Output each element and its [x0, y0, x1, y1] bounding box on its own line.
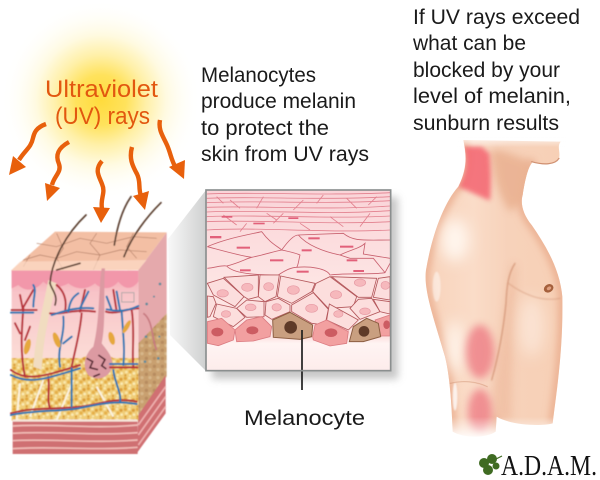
epidermis layer [12, 271, 138, 290]
label: ultraviolet rays: (UV) rays [55, 103, 150, 130]
text: melanocytes produce melanin: produce melanin [201, 90, 356, 113]
bottom fade [447, 417, 560, 440]
body contour lines [450, 158, 560, 387]
fat connective strands [17, 380, 113, 420]
text: melanocytes produce melanin: to protect the [201, 117, 329, 140]
contour edge shading [426, 140, 562, 432]
inset frame [206, 190, 391, 371]
text: sunburn explanation: level of melanin, [413, 85, 571, 108]
spinous cell nuclei [217, 279, 390, 317]
melanocyte cells [273, 312, 381, 342]
melanocyte nuclei [284, 321, 369, 337]
dermis layer [12, 271, 138, 358]
top fade [457, 133, 567, 147]
label: ultraviolet rays [45, 76, 158, 130]
text: sunburn explanation: blocked by your [413, 59, 560, 82]
mid flattened cell outlines [207, 232, 390, 275]
arm sunburn [466, 325, 494, 434]
melanocyte pointer line [299, 330, 304, 390]
dark cell nuclei upper layer [210, 216, 364, 273]
text: sunburn explanation: If UV rays exceed [413, 6, 580, 29]
torso shadow beside arm [493, 263, 517, 420]
inset shadow [212, 197, 398, 379]
neck shadow [490, 150, 532, 212]
nerve box [122, 293, 134, 302]
muscle layer [13, 419, 138, 454]
sun glow [1, 0, 201, 200]
arrow 1 [9, 124, 46, 175]
upper flattened cell layers [207, 193, 390, 232]
hairs [50, 197, 161, 305]
gland [85, 268, 112, 378]
basal pink nuclei [211, 320, 390, 337]
logo leaf icon [479, 454, 502, 475]
UV ray arrows [9, 120, 185, 223]
A.D.A.M. logo [479, 450, 597, 480]
right side face of skin block [137, 232, 167, 453]
clipped shading [426, 140, 562, 434]
text: sunburn explanation [412, 6, 580, 135]
arrow 4 [131, 147, 149, 210]
arrow 2 [45, 142, 69, 201]
text: sunburn explanation: what can be [412, 32, 526, 55]
neck sunburn [458, 147, 491, 201]
text: melanocytes produce melanin [201, 64, 369, 166]
gland ducts [87, 355, 106, 377]
basal pink cells [207, 315, 390, 346]
blood vessels: red [11, 285, 138, 413]
nipple [542, 282, 555, 294]
label: melanocyte: Melanocyte [244, 407, 365, 430]
text: melanocytes produce melanin: Melanocytes [201, 64, 316, 87]
blood vessels: blue [11, 285, 138, 415]
yellow sweat glands [22, 319, 132, 355]
spinous cells [207, 275, 390, 330]
body highlights [441, 218, 545, 373]
arrow 5 [160, 120, 185, 179]
label: ultraviolet rays: Ultraviolet [45, 76, 158, 103]
skin cross-section block [11, 197, 167, 454]
text: melanocytes produce melanin: skin from UV rays [201, 143, 369, 166]
connector funnel to inset [168, 190, 206, 371]
inset background [206, 190, 391, 371]
arm pale streaks [433, 272, 457, 411]
arrow 3 [93, 161, 110, 223]
text: sunburn explanation: sunburn results [413, 112, 559, 135]
torso and arm silhouette [426, 140, 562, 437]
body figure with sunburn [426, 133, 567, 440]
top surface of skin [11, 232, 167, 271]
fat layer [12, 354, 138, 421]
inset: magnified skin cells [206, 190, 391, 390]
hair follicle [33, 280, 57, 370]
